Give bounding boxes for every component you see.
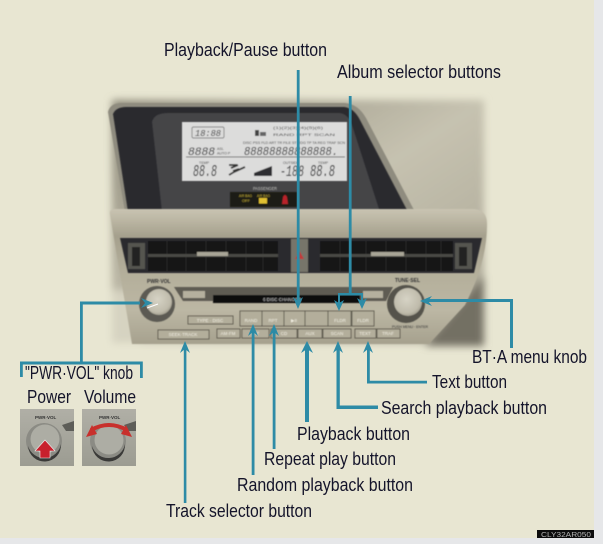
LCD display: ASL bbox=[217, 147, 224, 151]
button labels bbox=[169, 318, 394, 337]
left PWR-VOL knob: PWR·VOL bbox=[147, 279, 171, 285]
button labels: CD bbox=[281, 331, 288, 336]
thumbnail: power push: PWR·VOL bbox=[35, 415, 56, 420]
arrow: playback/pause bbox=[293, 70, 303, 309]
thumbnail: volume turn bbox=[82, 409, 136, 466]
dash panel bbox=[110, 209, 487, 344]
button labels: TRAF bbox=[382, 331, 394, 336]
label: power: Power bbox=[27, 386, 71, 407]
label: repeat play button: Repeat play button bbox=[264, 448, 396, 469]
arrow: repeat play bbox=[269, 324, 279, 449]
LCD display: -188 bbox=[280, 163, 304, 181]
button labels: ▶II bbox=[291, 318, 297, 323]
passenger airbag indicator bbox=[230, 186, 297, 207]
CD slot bbox=[174, 287, 393, 303]
arrow: power volume knob bbox=[80, 298, 158, 363]
bottom button row bbox=[158, 329, 400, 339]
label: PWR-VOL knob: "PWR·VOL" knob bbox=[25, 362, 133, 383]
thumbnail: power push bbox=[20, 409, 74, 466]
arrow: search playback bbox=[333, 341, 378, 409]
thumbnail: volume turn: PWR·VOL bbox=[99, 415, 120, 420]
left vent slats bbox=[148, 241, 278, 271]
right side vent knob bbox=[455, 243, 472, 269]
vent housing bbox=[120, 238, 482, 273]
LCD display bbox=[182, 122, 347, 182]
button labels: SCAN bbox=[331, 331, 343, 336]
label: track selector button: Track selector button bbox=[166, 500, 312, 521]
button labels: FLDR bbox=[357, 318, 370, 323]
button labels: FLDR bbox=[334, 318, 347, 323]
figure code: CLY32AR050 bbox=[541, 532, 591, 539]
right TUNE-SEL knob: PUSH MENU · ENTER bbox=[392, 325, 428, 329]
label: search playback button: Search playback button bbox=[381, 397, 547, 418]
arrow: BT-A menu knob bbox=[420, 296, 513, 348]
bracket: PWR-VOL knob bbox=[20, 362, 143, 378]
icon: red up arrow bbox=[35, 440, 55, 458]
button labels: AUX bbox=[305, 331, 315, 336]
label: playback button: Playback button bbox=[297, 423, 410, 444]
LCD display: 88.8 bbox=[310, 163, 335, 182]
right TUNE-SEL knob bbox=[387, 278, 428, 329]
air vents bbox=[120, 238, 482, 273]
arrow: text button bbox=[363, 341, 427, 384]
LCD display: 8888 bbox=[188, 147, 215, 159]
button labels: SEEK·TRACK bbox=[169, 332, 197, 337]
LCD display: TEMP bbox=[199, 161, 210, 165]
button labels: TYPE · DISC bbox=[197, 318, 224, 323]
button labels: SAT bbox=[251, 331, 259, 336]
button labels: TEXT bbox=[359, 331, 371, 336]
right vent slats bbox=[320, 241, 453, 271]
LCD display: 88888888888888. bbox=[244, 145, 338, 159]
label: random playback button: Random playback button bbox=[237, 474, 413, 495]
radio buttons bbox=[158, 311, 400, 339]
label: playback/pause button: Playback/Pause button bbox=[164, 39, 327, 60]
LCD display: (1)(2)(3)(4)(5)(6) bbox=[273, 126, 323, 130]
label: text button: Text button bbox=[432, 371, 507, 392]
LCD display: DISC PSS FLD ART TR FILE ST RDG TP TA REG TRAF SCN bbox=[243, 141, 345, 145]
LCD display: 88.8 bbox=[193, 163, 217, 182]
button labels: RPT bbox=[268, 318, 278, 323]
LCD display: OUTSIDE bbox=[283, 161, 300, 165]
label: volume: Volume bbox=[84, 386, 136, 407]
photo backdrop bbox=[112, 100, 484, 346]
right TUNE-SEL knob: TUNE·SEL bbox=[395, 278, 420, 284]
figure code bbox=[537, 530, 594, 539]
arrow: track selector bbox=[180, 341, 190, 503]
passenger airbag indicator: OFF bbox=[242, 198, 251, 203]
LCD display: 18:88 bbox=[195, 129, 222, 139]
CD slot: 6 DISC CHANGER bbox=[263, 297, 302, 302]
button labels: RAND bbox=[245, 318, 258, 323]
callout lines and arrows bbox=[20, 70, 513, 503]
icon: red curved double arrow bbox=[91, 425, 127, 430]
hazard button bbox=[291, 239, 308, 272]
left PWR-VOL knob bbox=[139, 279, 175, 322]
button labels: AM·FM bbox=[221, 331, 236, 336]
left side vent knob bbox=[128, 243, 145, 269]
passenger airbag indicator: AIR BAG bbox=[239, 194, 252, 198]
arrow: playback bbox=[301, 341, 313, 422]
arrow: random playback bbox=[248, 324, 258, 475]
label: album selector buttons: Album selector buttons bbox=[337, 61, 501, 82]
LCD display: TEMP bbox=[318, 161, 329, 165]
top button row bbox=[188, 311, 374, 326]
passenger airbag indicator: AIR BAG bbox=[257, 194, 270, 198]
display hood bbox=[108, 103, 415, 212]
dashboard photo bbox=[108, 100, 487, 346]
arrow: album selector bbox=[334, 96, 367, 311]
passenger airbag indicator: PASSENGER bbox=[253, 186, 277, 191]
LCD display: RAND RPT SCAN bbox=[273, 133, 336, 137]
LCD display: AUTO P bbox=[217, 152, 231, 156]
